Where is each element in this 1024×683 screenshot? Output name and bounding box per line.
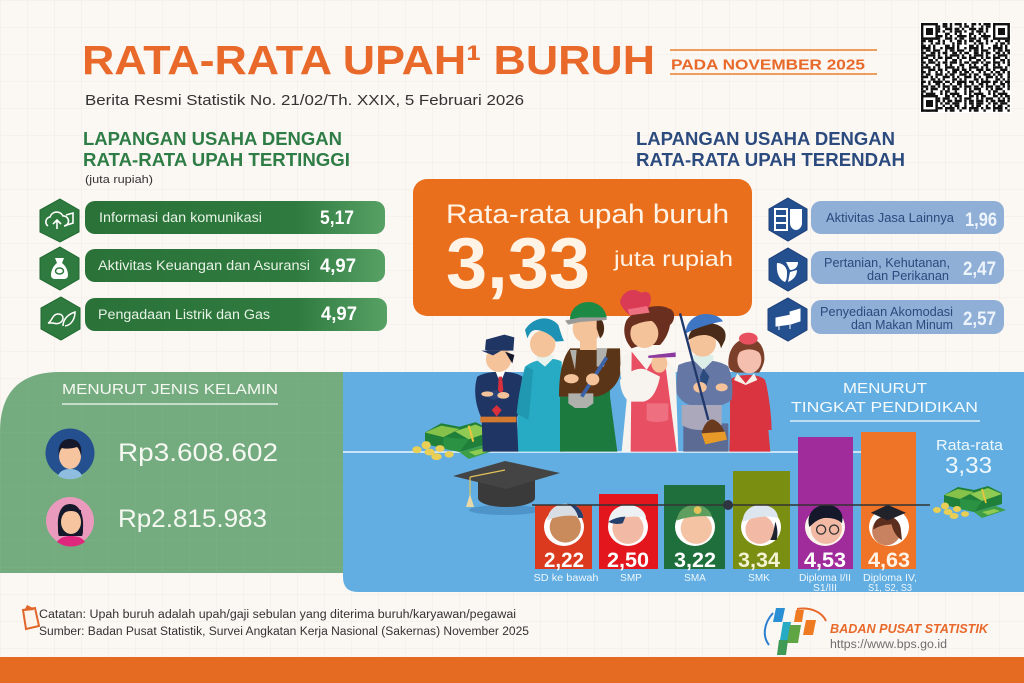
worker: chef (620, 290, 678, 452)
bar: SD ke bawah: 2,22 (544, 549, 584, 572)
row: Aktivitas Keuangan dan Asuransi (40, 247, 385, 290)
heading: education: TINGKAT PENDIDIKAN (791, 399, 978, 416)
worker: mechanic (559, 302, 621, 452)
row: Aktivitas Jasa Lainnya: Aktivitas Jasa Lainnya (826, 211, 954, 225)
BPS logo: BADAN PUSAT STATISTIK (830, 622, 989, 636)
bar labels: SMA (684, 573, 706, 584)
average line (532, 500, 930, 510)
period label: PADA NOVEMBER 2025 (671, 56, 865, 74)
bar: SMP: 2,50 (607, 549, 649, 572)
heading: lowest wages: LAPANGAN USAHA DENGAN (636, 129, 895, 149)
bar labels: SMP (620, 573, 642, 584)
period label (670, 50, 877, 74)
bar: SMA: 3,22 (674, 549, 716, 572)
value: woman: Rp2.815.983 (118, 505, 267, 533)
chart: wages by education (532, 432, 930, 594)
bar labels: SMK (748, 573, 770, 584)
bar labels: SD ke bawah (534, 573, 598, 584)
bar: Diploma IV, S1, S2, S3 (861, 432, 916, 572)
icon: graduation cap (453, 461, 560, 515)
row: Aktivitas Jasa Lainnya (769, 198, 1004, 241)
bar labels: S1/III (813, 583, 837, 594)
panel: highest wage rows (40, 199, 387, 340)
heading: lowest wages (636, 129, 905, 170)
row: Pertanian, Kehutanan, dan Perikanan: dan Perikanan (867, 269, 949, 283)
average label: Rata-rata (936, 437, 1004, 454)
average label (936, 437, 1004, 478)
worker: janitor (676, 314, 732, 452)
bar labels: Diploma IV, (863, 573, 917, 584)
row: Penyediaan Akomodasi dan Makan Minum: 2,57 (963, 309, 996, 330)
bar labels: S1, S2, S3 (868, 583, 912, 594)
row: Pertanian, Kehutanan, dan Perikanan (769, 248, 1004, 291)
row: Pengadaan Listrik dan Gas: 4,97 (321, 304, 357, 325)
heading: highest wages (83, 129, 350, 170)
panel: lowest wage rows (768, 198, 1004, 341)
panel: national average (413, 179, 752, 316)
panel: national average: 3,33 (446, 224, 590, 304)
value: man: Rp3.608.602 (118, 439, 278, 467)
bar: SMK (733, 471, 790, 572)
worker: security officer (475, 335, 523, 452)
bar: Diploma IV, S1, S2, S3: 4,63 (868, 549, 910, 572)
unit note: (juta rupiah) (85, 174, 153, 186)
worker: waitress (728, 333, 772, 452)
footer bar (0, 657, 1024, 683)
bar labels (534, 573, 917, 594)
heading: education (790, 380, 980, 421)
row: Aktivitas Keuangan dan Asuransi: 4,97 (320, 256, 356, 277)
row: Pertanian, Kehutanan, dan Perikanan: Pertanian, Kehutanan, (824, 256, 950, 270)
row: Aktivitas Jasa Lainnya: 1,96 (965, 210, 997, 231)
icon: woman (46, 497, 94, 547)
icon: clipboard (23, 605, 39, 629)
row: Penyediaan Akomodasi dan Makan Minum: dan Makan Minum (851, 318, 953, 332)
row: Pertanian, Kehutanan, dan Perikanan: 2,47 (963, 259, 996, 280)
row: Pengadaan Listrik dan Gas: Pengadaan Listrik dan Gas (98, 307, 270, 322)
worker: nurse in teal (517, 318, 564, 452)
row: Penyediaan Akomodasi dan Makan Minum (768, 298, 1004, 341)
heading: highest wages: LAPANGAN USAHA DENGAN (83, 129, 342, 149)
bar: SMP (599, 494, 658, 572)
BPS logo (765, 608, 989, 655)
average label: 3,33 (945, 452, 992, 478)
icon: money left (412, 422, 496, 460)
subtitle: Berita Resmi Statistik No. 21/02/Th. XXIX, 5 Februari 2026 (85, 93, 524, 109)
icon: money right (933, 486, 1006, 519)
row: Pengadaan Listrik dan Gas (41, 297, 387, 340)
illustration: six workers (475, 290, 772, 452)
footer note (23, 605, 529, 638)
bar: Diploma I/II/III (798, 437, 853, 572)
row: Aktivitas Keuangan dan Asuransi: Aktivitas Keuangan dan Asuransi (98, 258, 310, 273)
row: Penyediaan Akomodasi dan Makan Minum: Penyediaan Akomodasi (820, 305, 953, 319)
bar: SD ke bawah (535, 504, 592, 572)
QR code (920, 22, 1011, 113)
heading: gender: MENURUT JENIS KELAMIN (62, 381, 278, 398)
panel: by gender (0, 372, 350, 573)
row: Informasi dan komunikasi: 5,17 (320, 208, 354, 229)
footer note: Catatan: Upah buruh adalah upah/gaji sebulan yang diterima buruh/karyawan/pegawai (39, 609, 516, 621)
panel: by education (343, 372, 1024, 594)
icon: man (46, 428, 94, 479)
bar labels: Diploma I/II (799, 573, 851, 584)
bar: SMK: 3,34 (738, 549, 780, 572)
panel: national average: juta rupiah (613, 248, 733, 271)
heading: highest wages: RATA-RATA UPAH TERTINGGI (83, 150, 350, 170)
panel: national average: Rata-rata upah buruh (446, 199, 729, 229)
bar: Diploma I/II/III: 4,53 (804, 549, 846, 572)
title: RATA-RATA UPAH¹ BURUH (82, 37, 655, 83)
row: Informasi dan komunikasi: Informasi dan komunikasi (99, 210, 262, 225)
heading: education: MENURUT (843, 380, 927, 397)
broom (680, 313, 727, 444)
bar: SMA (664, 485, 725, 572)
footer note: Sumber: Badan Pusat Statistik, Survei Angkatan Kerja Nasional (Sakernas) November 2025 (39, 626, 529, 638)
logo mark (765, 608, 826, 655)
BPS logo: https://www.bps.go.id (830, 639, 947, 651)
row: Informasi dan komunikasi (40, 199, 385, 242)
heading: lowest wages: RATA-RATA UPAH TERENDAH (636, 150, 905, 170)
